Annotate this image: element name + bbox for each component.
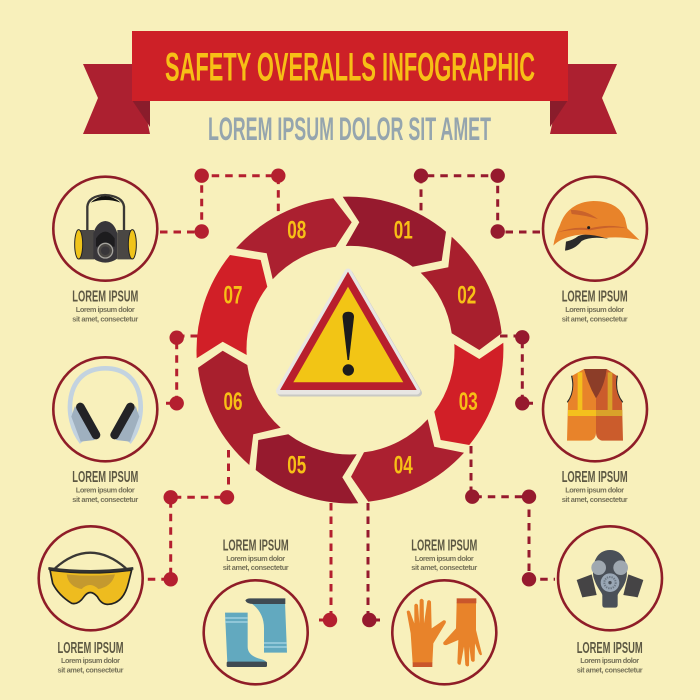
segment 01 xyxy=(343,197,446,267)
icon: warning triangle xyxy=(280,272,418,393)
label: LOREM IPSUM xyxy=(562,469,628,486)
label: LOREM IPSUM xyxy=(58,640,124,657)
icon: goggles xyxy=(48,553,133,604)
label: sit amet, consectetur xyxy=(577,666,643,674)
panel: gas mask xyxy=(558,526,662,674)
icon: rubber boots xyxy=(225,598,287,667)
label: LOREM IPSUM xyxy=(577,640,643,657)
panel: gloves xyxy=(392,538,496,684)
label xyxy=(58,640,124,674)
label xyxy=(411,538,477,572)
icon: safety vest xyxy=(567,369,623,441)
segmented arrow ring xyxy=(197,197,503,503)
label xyxy=(577,640,643,674)
segment 01: 01 xyxy=(394,216,413,244)
left ribbon tail xyxy=(83,64,150,134)
segment 03: 03 xyxy=(459,388,478,416)
label: sit amet, consectetur xyxy=(223,563,289,572)
label: LOREM IPSUM xyxy=(562,288,628,306)
label: LOREM IPSUM xyxy=(411,538,477,555)
segment 04: 04 xyxy=(394,451,413,479)
segment 08 xyxy=(236,198,352,279)
segment 08: 08 xyxy=(287,216,306,244)
panel: rubber boots xyxy=(204,538,308,684)
label xyxy=(72,469,138,504)
connector: top left xyxy=(160,168,285,239)
label xyxy=(72,288,138,324)
segment 02: 02 xyxy=(457,281,476,309)
segment 05 xyxy=(256,434,358,503)
connector: left middle xyxy=(166,330,198,410)
banner band xyxy=(132,31,568,101)
icon: ear defenders xyxy=(70,368,141,442)
panel: hard hat xyxy=(543,177,647,324)
label: LOREM IPSUM xyxy=(72,469,138,486)
label: Lorem ipsum dolor xyxy=(76,486,135,494)
panel: respirator xyxy=(53,177,157,324)
icon: gloves xyxy=(407,598,482,667)
label: Lorem ipsum dolor xyxy=(415,554,474,563)
segment 06: 06 xyxy=(224,388,242,416)
label xyxy=(562,469,628,504)
label: Lorem ipsum dolor xyxy=(76,305,135,314)
label: sit amet, consectetur xyxy=(58,666,124,674)
connector lines and dots xyxy=(147,168,555,627)
segment 06 xyxy=(198,351,281,465)
panel: ear defenders xyxy=(53,357,157,504)
label: Lorem ipsum dolor xyxy=(565,305,624,314)
connector: bottom left xyxy=(317,503,337,627)
label: sit amet, consectetur xyxy=(72,314,138,324)
label: sit amet, consectetur xyxy=(562,495,628,504)
segment 02 xyxy=(421,237,502,350)
panel: goggles xyxy=(39,526,143,674)
label: sit amet, consectetur xyxy=(562,314,628,324)
segment 04 xyxy=(351,419,464,502)
title banner xyxy=(83,31,617,134)
connector: right middle xyxy=(500,330,533,410)
label: Lorem ipsum dolor xyxy=(61,656,120,665)
label xyxy=(562,288,628,324)
icon: hard hat xyxy=(553,201,639,251)
right ribbon tail xyxy=(550,64,617,134)
icon: gas mask xyxy=(577,550,643,608)
panel: safety vest xyxy=(543,357,647,504)
icon: respirator xyxy=(75,195,136,263)
segment 03 xyxy=(434,343,503,445)
segment 07: 07 xyxy=(224,281,242,309)
label xyxy=(223,538,289,572)
segment 07 xyxy=(197,255,267,358)
label: Lorem ipsum dolor xyxy=(565,486,624,494)
label: sit amet, consectetur xyxy=(411,563,477,572)
connector: lower left xyxy=(147,450,234,586)
connector: bottom right xyxy=(362,503,383,627)
label: LOREM IPSUM xyxy=(223,538,289,555)
connector: lower right xyxy=(465,446,555,586)
label: Lorem ipsum dolor xyxy=(580,656,639,665)
connector: top right xyxy=(414,168,540,239)
segment 05: 05 xyxy=(287,451,306,479)
label: sit amet, consectetur xyxy=(72,495,138,504)
label: Lorem ipsum dolor xyxy=(226,554,285,563)
label: LOREM IPSUM xyxy=(72,288,138,306)
